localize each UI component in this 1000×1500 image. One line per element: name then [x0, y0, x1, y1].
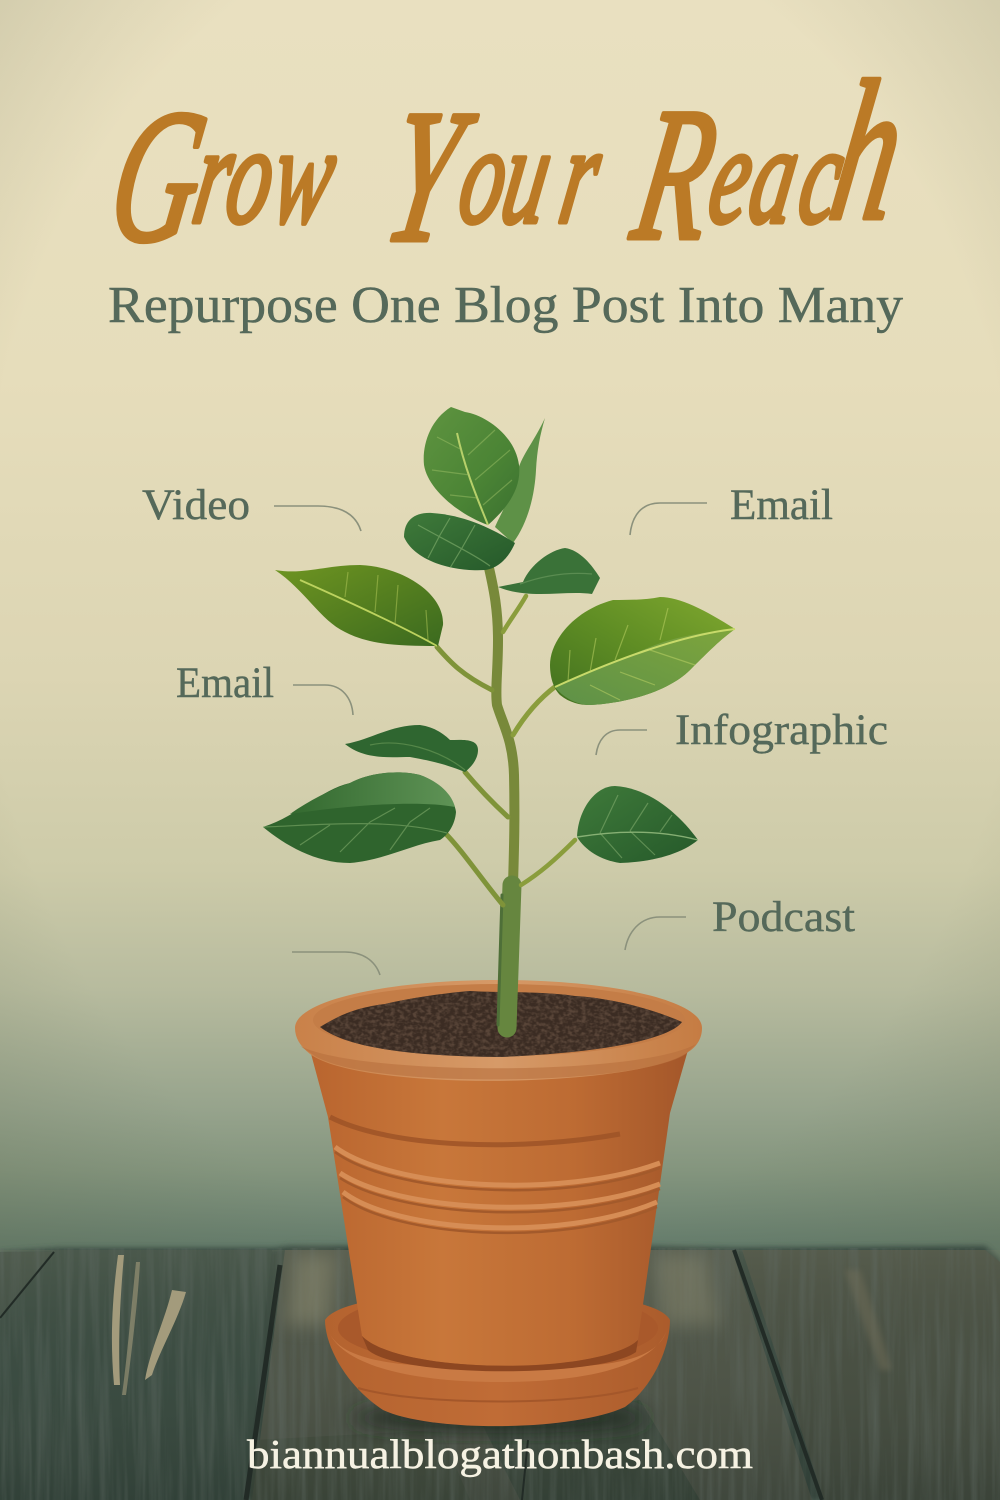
- website footer: biannualblogathonbash.com: [247, 1431, 753, 1477]
- title: c: [789, 98, 855, 253]
- stems: [437, 568, 575, 1028]
- label: Email left: Email: [176, 660, 274, 707]
- plant pot with saucer: [295, 980, 702, 1430]
- pot base shadow: [362, 1336, 638, 1371]
- pot grooves: [330, 1117, 660, 1233]
- title: w: [262, 98, 347, 253]
- pale streaks: [112, 1255, 186, 1395]
- leaf: top: [424, 407, 519, 525]
- leaf: small left: [345, 725, 478, 772]
- title: G: [97, 71, 219, 282]
- title: Y: [373, 71, 487, 282]
- title: r: [551, 98, 612, 253]
- labels: [142, 482, 888, 941]
- leaf: lower right: [577, 786, 698, 863]
- leaf: right large: [550, 597, 735, 705]
- subtitle: Repurpose One Blog Post Into Many: [108, 277, 903, 334]
- label: Email right: Email: [730, 482, 833, 529]
- leaf: small right: [498, 548, 600, 594]
- title: e: [699, 98, 765, 253]
- title: o: [449, 98, 520, 253]
- leaf: left large: [275, 565, 443, 646]
- title: h: [818, 41, 919, 262]
- label: Podcast: Podcast: [712, 894, 855, 941]
- leaf: upper dark: [404, 513, 515, 570]
- title: r: [184, 98, 246, 253]
- title: R: [621, 69, 731, 280]
- title: u: [492, 98, 563, 253]
- label: Video: Video: [142, 482, 250, 529]
- label: Infographic: Infographic: [675, 707, 888, 754]
- pot body: [310, 1050, 688, 1366]
- pot rim: [295, 980, 702, 1081]
- saucer: [325, 1290, 670, 1430]
- plant: [263, 407, 735, 1028]
- plank gaps: [0, 1250, 822, 1500]
- leaf: narrow back: [495, 418, 545, 543]
- wooden table: [0, 1246, 1000, 1500]
- connector lines: [274, 503, 707, 975]
- leaf: lower left large: [263, 772, 456, 863]
- title: o: [216, 98, 287, 253]
- title: a: [740, 98, 810, 253]
- soil: [320, 991, 682, 1057]
